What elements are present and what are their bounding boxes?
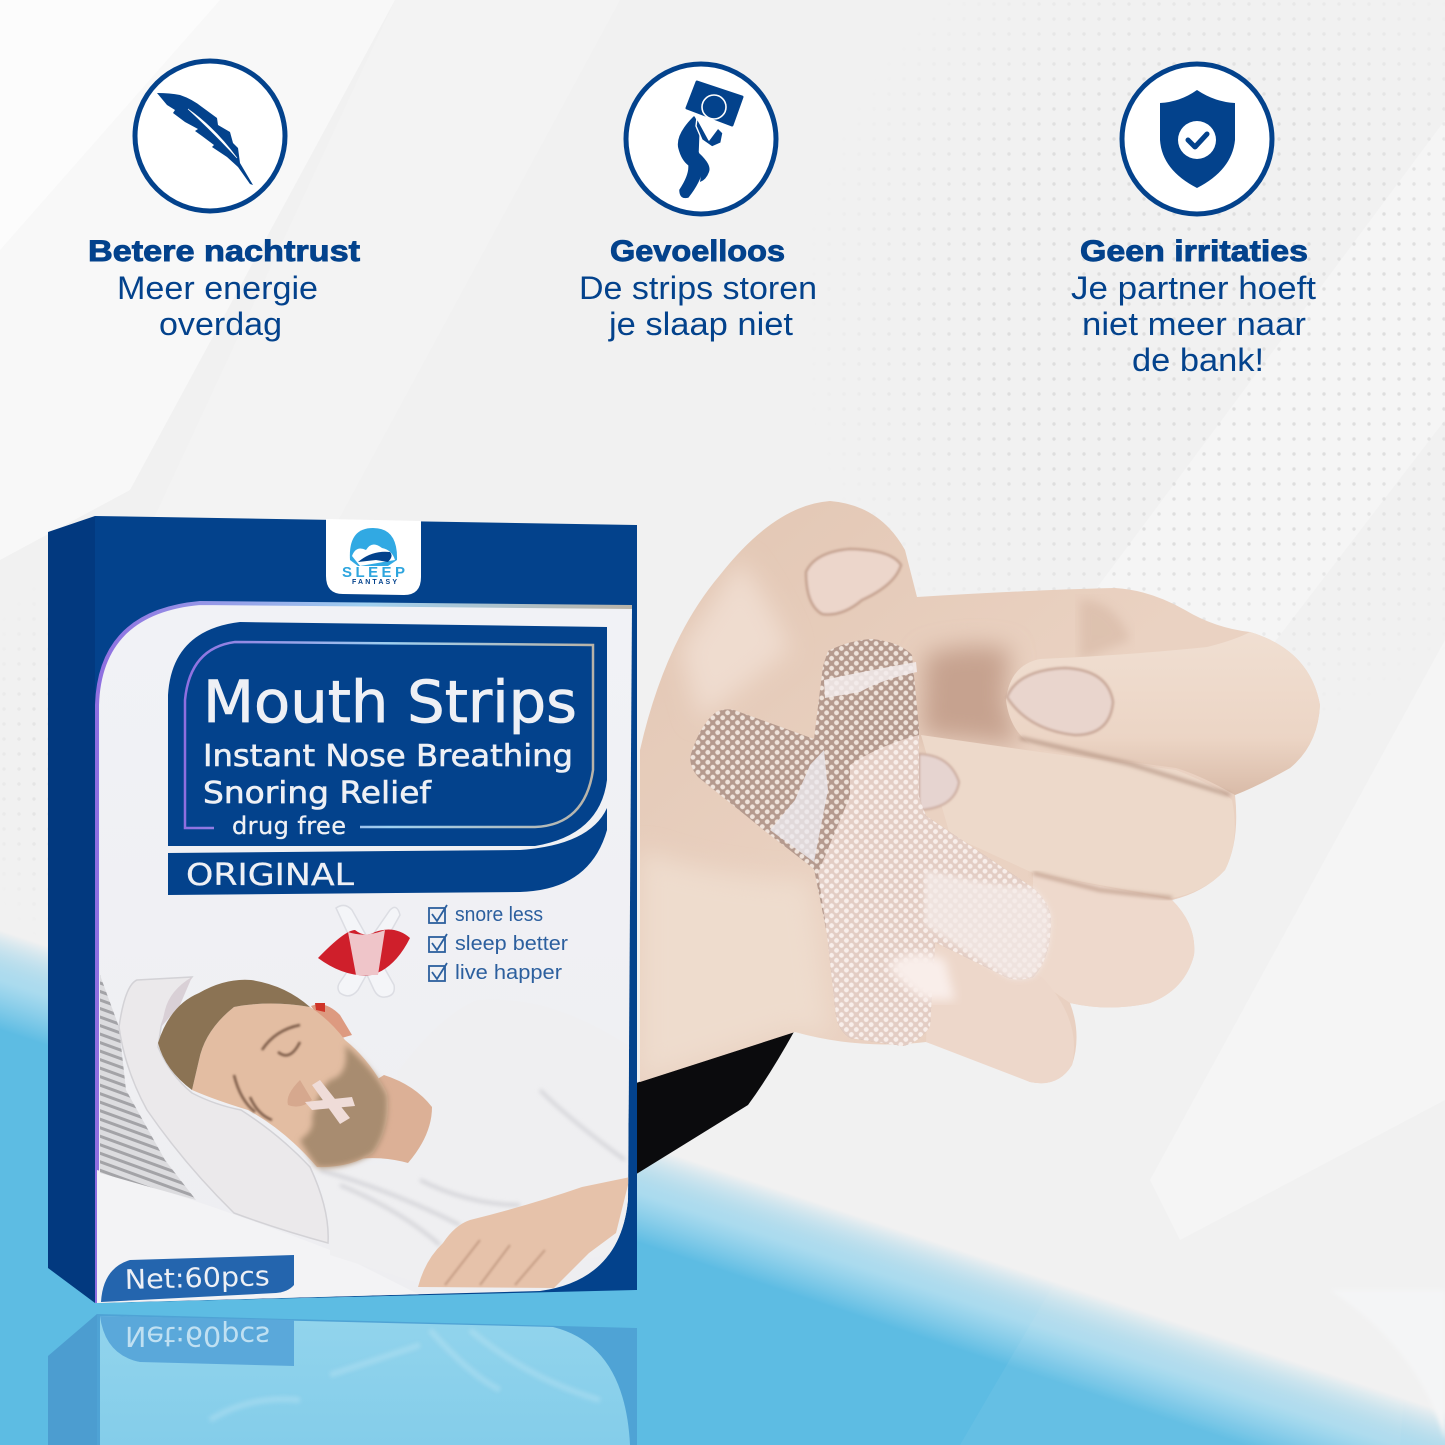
middle finger [919, 735, 1235, 898]
text: description: de bank! [1132, 342, 1264, 378]
ring finger [1033, 873, 1194, 1008]
text: description [1071, 270, 1316, 378]
ear [311, 1004, 352, 1040]
text: description: niet meer naar [1082, 306, 1306, 342]
title panel: Mouth Strips [203, 668, 577, 736]
title panel [168, 622, 607, 895]
hair [158, 980, 310, 1090]
white photo panel [97, 603, 632, 1303]
neck [363, 1075, 432, 1163]
title panel: Instant Nose Breathing [203, 739, 573, 774]
heading: Gevoelloos [610, 235, 785, 268]
title panel: Snoring Relief [203, 776, 433, 811]
checklist [429, 904, 568, 984]
striped pillow [100, 975, 196, 1200]
beard [300, 1045, 387, 1167]
title panel: drug free [232, 812, 346, 840]
reflected net label [100, 1316, 294, 1366]
lips with strip [318, 905, 410, 997]
photo: sleeping man [97, 975, 630, 1310]
logo tab: FANTASY [352, 579, 397, 586]
hand holding mouth strip [630, 501, 1320, 1178]
net label: Net:60pcs [124, 1261, 270, 1296]
box side [48, 516, 95, 1303]
blue wave background [0, 880, 1445, 1445]
little finger [926, 942, 1074, 1083]
logo tab: SLEEP [342, 564, 405, 581]
reflected panel [100, 1316, 630, 1445]
checklist: sleep better [455, 933, 568, 955]
text: description: Meer energie [117, 270, 318, 306]
benefit 2: unnoticeable [579, 64, 817, 342]
title panel: ORIGINAL [186, 858, 354, 893]
shirt [320, 1046, 630, 1254]
logo tab [326, 519, 421, 595]
background [0, 0, 1445, 860]
text: description: Je partner hoeft [1071, 270, 1316, 306]
heading: Betere nachtrust [88, 235, 360, 268]
mouth strip [690, 639, 1051, 1046]
face [192, 1004, 388, 1167]
text: description: je slaap niet [608, 306, 793, 342]
product box reflection [48, 1314, 637, 1445]
reflected hand and shirt [210, 1330, 600, 1420]
index finger [1006, 632, 1320, 795]
eyes and brow [234, 1025, 300, 1120]
box front [95, 516, 637, 1303]
product box [48, 516, 637, 1310]
icon: sleeping person [626, 64, 776, 214]
checklist: live happer [455, 962, 562, 984]
benefit 3: no irritation [1071, 64, 1316, 378]
heading: Geen irritaties [1080, 235, 1308, 268]
hand shading [640, 560, 1130, 1080]
hand and arm [418, 1177, 630, 1288]
net label [101, 1255, 294, 1302]
sleeve [630, 1030, 795, 1178]
thumb nail [806, 549, 901, 614]
text: description: De strips storen [579, 270, 817, 306]
nose [288, 1080, 312, 1107]
white pillow [119, 977, 328, 1243]
benefit 1: better night rest [88, 61, 360, 342]
strip highlights [770, 662, 1051, 1000]
text: description: overdag [159, 306, 282, 342]
text: description [579, 270, 817, 342]
icon: shield check [1122, 64, 1272, 214]
icon: feather [135, 61, 285, 211]
text: description [117, 270, 318, 342]
hand shape [640, 501, 1320, 1083]
blanket [97, 1170, 420, 1310]
reflected net label: Net:60pcs [125, 1320, 270, 1353]
checklist: snore less [455, 904, 543, 926]
mouth tape [305, 1080, 355, 1124]
